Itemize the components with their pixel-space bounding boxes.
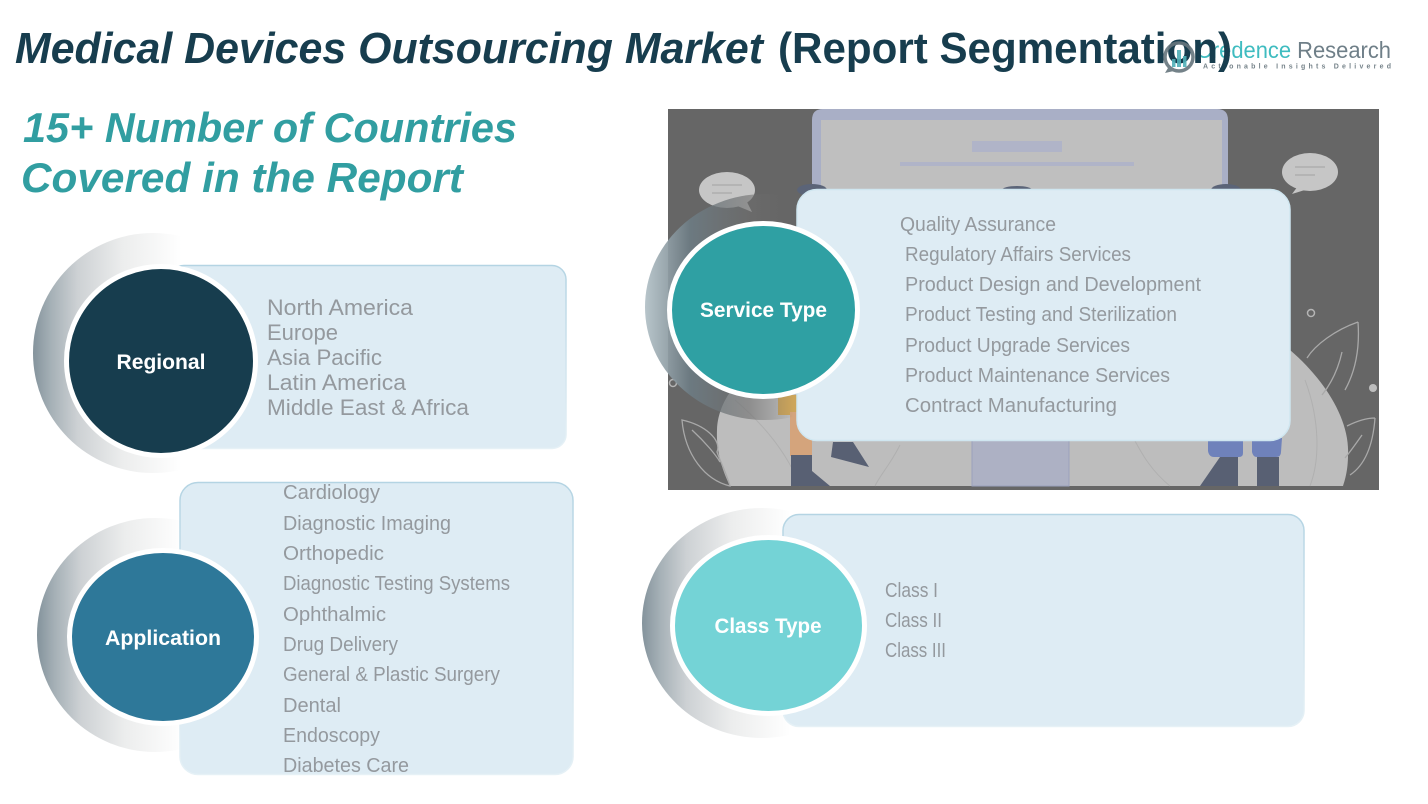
illustration: monitor — [797, 109, 1241, 200]
list: service types — [900, 214, 1201, 417]
ring: class type — [642, 508, 882, 738]
title — [15, 24, 1232, 73]
ring: application — [37, 518, 273, 752]
group: application — [37, 482, 573, 777]
list: applications: Cardiology — [283, 482, 380, 504]
list: service types: Product Testing and Sterilization — [905, 304, 1177, 326]
illustration: speech bubble right — [1282, 153, 1338, 194]
circle: service type — [670, 224, 858, 396]
title: market name: Medical Devices Outsourcing Market — [15, 24, 765, 73]
title: report segmentation: (Report Segmentation) — [778, 24, 1232, 73]
label: class type: Class Type — [714, 615, 822, 638]
circle: application — [70, 550, 256, 724]
list: applications: Diagnostic Imaging — [283, 513, 451, 535]
list: service types: Product Design and Development — [905, 274, 1201, 296]
list: applications: Endoscopy — [283, 725, 380, 747]
list: applications: Diagnostic Testing Systems — [283, 573, 510, 595]
list: regions — [267, 295, 470, 420]
subtitle: countries covered — [21, 104, 517, 201]
illustration: leaves — [682, 322, 1375, 486]
panel: class type list — [783, 514, 1304, 726]
group: service type — [645, 190, 1290, 440]
list: service types: Quality Assurance — [900, 214, 1056, 236]
list: regions: Europe — [267, 320, 338, 345]
icon: logo mark — [1165, 43, 1193, 73]
illustration: small dots — [670, 310, 1377, 392]
ring: regional — [33, 233, 273, 473]
logo wordmark: Credence Research — [1196, 37, 1391, 63]
illustration: faint blob veins — [735, 380, 1317, 486]
list: class types: Class II — [885, 610, 942, 632]
list: applications: Orthopedic — [283, 543, 384, 565]
list: service types: Regulatory Affairs Services — [905, 244, 1131, 266]
list: regions: Latin America — [267, 370, 407, 395]
illustration: speech bubble left — [699, 172, 755, 212]
subtitle: countries covered: 15+ Number of Countries — [23, 104, 517, 151]
list: applications: Diabetes Care — [283, 755, 409, 777]
illustration: stand — [972, 436, 1069, 486]
label: regional: Regional — [116, 351, 206, 374]
list: class types: Class III — [885, 640, 946, 662]
panel: service type list — [797, 190, 1290, 440]
list: regions: North America — [267, 295, 414, 320]
group: regional — [33, 233, 566, 473]
list: class types — [885, 580, 946, 662]
ring: service type — [645, 194, 885, 420]
circle: regional — [66, 266, 256, 456]
illustration: right figure — [1200, 438, 1282, 486]
list: applications: Drug Delivery — [283, 634, 398, 656]
list: regions: Asia Pacific — [267, 345, 382, 370]
list: applications: General & Plastic Surgery — [283, 664, 500, 686]
logo tagline: Actionable Insights Delivered — [1203, 64, 1391, 70]
panel: application list — [180, 482, 573, 774]
list: regions: Middle East & Africa — [267, 395, 470, 420]
subtitle: countries covered: Covered in the Report — [21, 154, 465, 201]
list: service types: Product Maintenance Services — [905, 365, 1170, 387]
list: class types: Class I — [885, 580, 938, 602]
list: applications: Ophthalmic — [283, 604, 386, 626]
panel: illustration background — [668, 109, 1379, 490]
list: applications: Dental — [283, 695, 341, 717]
panel: regional list — [170, 266, 566, 448]
list: service types: Product Upgrade Services — [905, 335, 1130, 357]
illustration: floor blobs — [717, 345, 1348, 486]
list: applications — [283, 482, 510, 777]
circle: class type — [672, 538, 864, 714]
list: service types: Contract Manufacturing — [905, 395, 1117, 417]
group: class type — [642, 508, 1304, 738]
label: application: Application — [105, 627, 221, 650]
illustration: left figure — [778, 395, 869, 486]
label: service type: Service Type — [700, 299, 827, 322]
